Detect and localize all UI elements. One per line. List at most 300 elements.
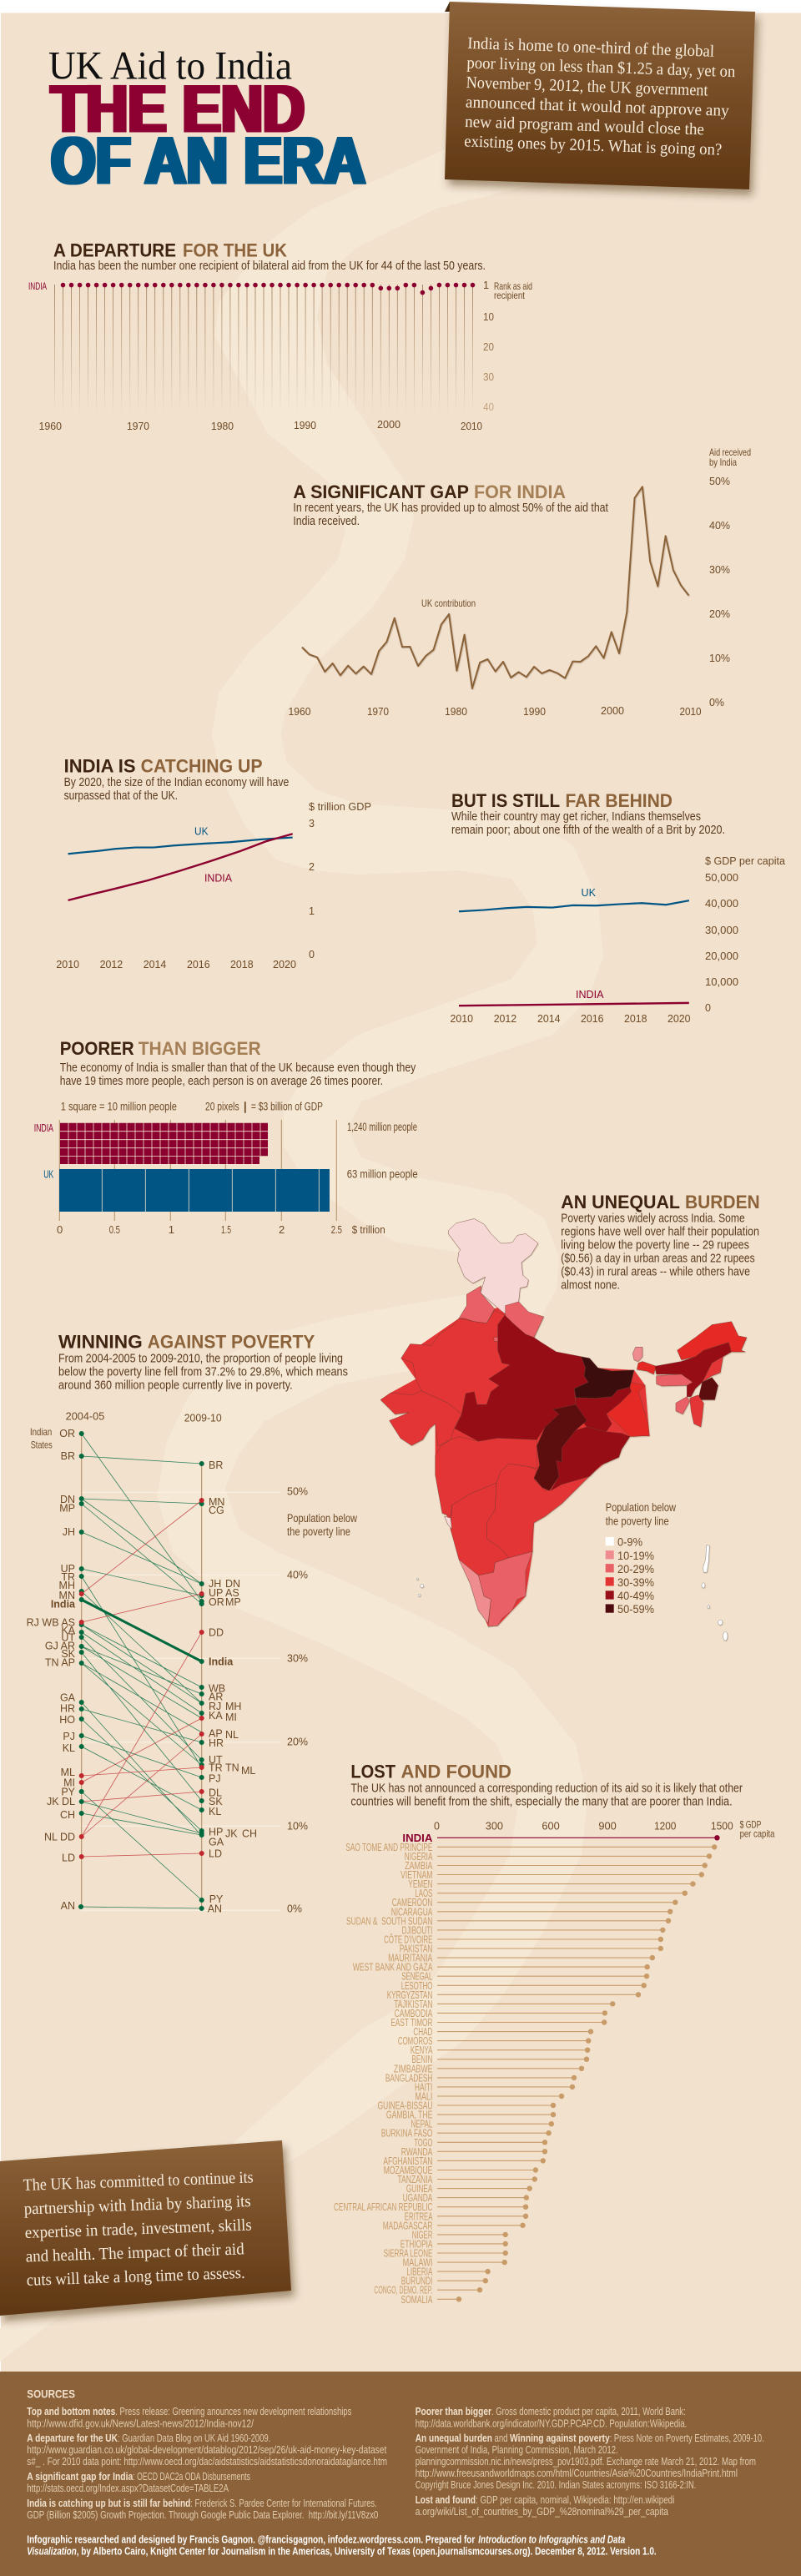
green dots [81, 1434, 202, 1908]
heading [64, 756, 263, 777]
year axis [451, 1013, 691, 1025]
column headers: States [31, 1439, 53, 1451]
intro callout text: November 9, 2012, the UK government [466, 73, 708, 100]
left state labels: UT [61, 1632, 75, 1644]
country labels: TANZANIA [397, 2173, 433, 2185]
country labels: GAMBIA, THE [386, 2109, 433, 2121]
left state labels: BR [61, 1450, 75, 1462]
subheading: regions have well over half their population [561, 1224, 759, 1238]
left state labels: HO [59, 1714, 75, 1726]
subheading: below the poverty line fell from 37.2% to 29.8%, which means [58, 1364, 348, 1379]
GDP per capita axis: 0 [705, 1002, 711, 1014]
sources left column: : Frederick S. Pardee Center for International Futures. [190, 2498, 377, 2509]
country labels: ZIMBABWE [394, 2062, 433, 2074]
year axis: 2010 [461, 421, 482, 432]
unit legend: 20 pixels ❙ = $3 billion of GDP [205, 1101, 323, 1114]
line: UK GDP [68, 838, 293, 854]
sources left column: : Guardian Data Blog on UK Aid 1960-2009. [118, 2432, 270, 2444]
right state labels: SK [209, 1796, 223, 1807]
country labels: CHAD [413, 2025, 432, 2038]
country labels: TAJIKISTAN [394, 1998, 432, 2010]
West Bengal north corridor [637, 1362, 657, 1374]
country labels: ETHIOPIA [400, 2237, 433, 2250]
percentage axis: the poverty line [287, 1525, 350, 1538]
closing callout text: and health. The impact of their aid [25, 2240, 244, 2266]
right state labels: NL [225, 1729, 239, 1741]
map legend: the poverty line [606, 1515, 669, 1527]
percentage axis [709, 446, 751, 708]
year axis: 2010 [679, 706, 702, 718]
year axis: 2020 [273, 959, 296, 970]
line labels: INDIA [204, 873, 233, 885]
left state labels: HR [60, 1703, 75, 1715]
country labels: SOMALIA [400, 2293, 433, 2306]
left state labels [27, 1428, 76, 1912]
country labels [334, 1832, 433, 2306]
line: India GDP per capita [459, 1003, 689, 1006]
right state labels: India [209, 1656, 234, 1667]
GDP per capita axis: 1200 [654, 1821, 676, 1832]
year axis: 1970 [127, 421, 149, 432]
credits: Visualization [27, 2546, 77, 2558]
series label: INDIA [28, 280, 47, 292]
section: lost and found [334, 1762, 775, 2306]
country labels: NICARAGUA [391, 1905, 433, 1918]
map legend: 40-49% [617, 1589, 654, 1602]
Mizoram [690, 1395, 703, 1427]
GDP per capita axis: 900 [598, 1821, 617, 1832]
country labels: CONGO, DEMO. REP. [374, 2284, 432, 2296]
country labels: SAO TOME AND PRINCIPE [345, 1841, 433, 1853]
trillion axis: $ trillion [352, 1223, 385, 1236]
GDP per capita axis: 50,000 [705, 872, 738, 884]
Jammu, Kashmir and Himachal [448, 1218, 538, 1314]
country labels: SUDAN & SOUTH SUDAN [346, 1914, 432, 1927]
percentage axis: Aid received [709, 446, 751, 458]
sources left column: Top and bottom notes [27, 2406, 115, 2417]
right state labels: ML [241, 1765, 255, 1777]
sources right column: An unequal burden [416, 2432, 492, 2444]
country labels: LAOS [415, 1887, 433, 1899]
closing callout text: expertise in trade, investment, skills [24, 2216, 252, 2242]
year axis: 2014 [144, 959, 166, 970]
West Bengal [607, 1370, 649, 1436]
trillion axis: 1.5 [221, 1223, 231, 1236]
right state labels: PJ [209, 1772, 221, 1784]
column headers: Indian [30, 1426, 52, 1438]
country labels: PAKISTAN [400, 1943, 432, 1954]
country labels: AFGHANISTAN [383, 2155, 432, 2167]
right state labels: JK [225, 1828, 238, 1840]
unit legend: 1 square = 10 million people [61, 1101, 177, 1113]
line labels: UK [194, 826, 209, 838]
subheading: around 360 million people currently live in poverty. [58, 1378, 293, 1392]
Bihar [574, 1357, 634, 1399]
left state labels: GJ AR [45, 1641, 75, 1652]
heading: FAR BEHIND [566, 790, 673, 811]
year axis: 2014 [537, 1013, 561, 1025]
percentage axis: 50% [709, 476, 730, 487]
left state labels: SK [61, 1648, 76, 1660]
left state labels: TR [61, 1571, 75, 1583]
Goa [445, 1516, 452, 1529]
year axis: 2012 [494, 1013, 516, 1025]
Maharashtra [436, 1436, 537, 1516]
country labels: KENYA [411, 2044, 433, 2056]
subheading [561, 1211, 759, 1292]
heading: AGAINST POVERTY [148, 1332, 315, 1353]
GDP per capita axis: $ GDP [740, 1819, 761, 1831]
country labels: INDIA [402, 1832, 433, 1844]
sources left column: A significant gap for India [27, 2471, 134, 2483]
GDP axis [309, 801, 371, 960]
subheading: almost none. [561, 1278, 620, 1292]
column headers [30, 1411, 222, 1451]
heading: WINNING [58, 1332, 143, 1353]
sources right column [416, 2406, 764, 2518]
heading: A SIGNIFICANT GAP [293, 481, 469, 502]
GDP axis: 2 [309, 861, 315, 873]
left state labels: UP [61, 1563, 75, 1575]
heading: LOST [350, 1762, 396, 1782]
sources footer [0, 2372, 801, 2576]
percentage axis: 30% [709, 564, 730, 576]
section: poorer than bigger [34, 1038, 418, 1236]
country labels: COMOROS [398, 2034, 433, 2047]
Chhattisgarh [534, 1404, 587, 1491]
percentage axis: 40% [287, 1570, 308, 1581]
GDP per capita axis: 10,000 [705, 976, 738, 988]
right state labels: UP [209, 1587, 223, 1599]
country labels: CAMEROON [392, 1896, 432, 1908]
subheading: ($0.56) a day in urban areas and 22 rupees [561, 1252, 755, 1265]
section: India is catching up [56, 756, 371, 970]
trillion axis: 0.5 [109, 1223, 120, 1236]
rank axis: Rank as aid [494, 280, 532, 292]
right state labels: KA [209, 1710, 223, 1722]
right state labels: MN [209, 1496, 224, 1508]
year axis: 2010 [451, 1013, 473, 1025]
left state labels: JK DL [47, 1796, 75, 1807]
left state labels: DN [60, 1494, 75, 1505]
red dots [82, 1500, 202, 1857]
heading: POORER [60, 1038, 134, 1059]
Meghalaya [657, 1374, 693, 1386]
sources right column: . Gross domestic product per capita, 2011, World Bank: [491, 2406, 686, 2417]
rank axis: 30 [483, 371, 494, 383]
subheading: While their country may get richer, Indians themselves [451, 809, 701, 824]
heading: CATCHING UP [141, 756, 263, 777]
subheading: have 19 times more people, each person is on average 26 times poorer. [60, 1074, 383, 1088]
sources left column: s#_ . For 2010 data point: http://www.oecd.org/dac/aidstatistics/aidstatisticsdonoraidataglance.htm [27, 2456, 387, 2468]
year axis [38, 419, 482, 432]
Gujarat [380, 1391, 461, 1446]
Karnataka [451, 1483, 509, 1575]
map legend: Population below [606, 1501, 676, 1514]
Jharkhand [576, 1387, 632, 1432]
Tamil Nadu [478, 1551, 532, 1626]
percentage axis: 10% [287, 1821, 308, 1832]
Arunachal Pradesh [678, 1322, 747, 1360]
GDP per capita axis: 20,000 [705, 950, 738, 962]
country labels: MALI [415, 2090, 432, 2103]
intro callout text: India is home to one-third of the global [467, 34, 715, 61]
sources right column: Government of India, Planning Commission, March 2012. [416, 2444, 618, 2456]
axis gridlines [59, 1120, 336, 1221]
year axis: 2000 [377, 419, 400, 431]
trillion axis: 1 [169, 1223, 174, 1236]
heading [451, 790, 673, 811]
line labels: INDIA [576, 989, 604, 1001]
Manipur [698, 1378, 718, 1399]
right state labels: AR [209, 1691, 223, 1703]
left state labels: LD [62, 1853, 75, 1864]
mainland base fill [380, 1306, 649, 1626]
percentage axis: 20% [709, 608, 730, 620]
right state labels: DN [225, 1578, 240, 1590]
GDP axis: 3 [309, 818, 315, 829]
country labels: SIERRA LEONE [384, 2246, 433, 2260]
country labels: NIGER [412, 2228, 432, 2241]
right state labels: HP [209, 1826, 223, 1837]
country labels: EAST TIMOR [390, 2016, 432, 2029]
heading [561, 1192, 760, 1212]
sources right column: Poorer than bigger [416, 2406, 491, 2417]
year axis: 1970 [367, 706, 389, 718]
right state labels: MH [225, 1701, 241, 1712]
subheading: From 2004-2005 to 2009-2010, the proportion of people living [58, 1351, 343, 1365]
country labels: DJIBOUTI [402, 1923, 432, 1936]
Punjab [459, 1286, 495, 1323]
sources left column: A departure for the UK [27, 2432, 118, 2444]
country labels: UGANDA [403, 2191, 433, 2204]
rank axis: 20 [483, 341, 494, 353]
subheading: countries will benefit from the shift, especially the many that are poorer than India. [350, 1794, 733, 1808]
subheading: surpassed that of the UK. [64, 789, 178, 803]
GDP per capita axis: per capita [740, 1828, 775, 1840]
country labels: VIETNAM [400, 1868, 432, 1881]
country labels: HAITI [415, 2080, 432, 2093]
GDP per capita axis: 1500 [711, 1821, 733, 1832]
country labels: BANGLADESH [385, 2071, 432, 2084]
country labels: NEPAL [411, 2118, 432, 2130]
unit legend [61, 1101, 323, 1114]
year axis: 1980 [211, 421, 234, 432]
percentage axis: 20% [287, 1737, 308, 1748]
left state labels: KL [63, 1742, 75, 1754]
trillion axis: 2 [279, 1223, 285, 1236]
section: winning against poverty [27, 1332, 357, 1915]
closing callout box [0, 2140, 291, 2316]
map legend [606, 1501, 676, 1616]
sources left column [27, 2406, 387, 2521]
UK bar [59, 1169, 330, 1212]
subheading: living below the poverty line -- 29 rupees [561, 1238, 749, 1252]
rank axis: recipient [494, 290, 526, 301]
country labels: WEST BANK AND GAZA [353, 1961, 433, 1974]
islands [416, 1545, 728, 1641]
left state labels: PY [61, 1787, 76, 1798]
left state labels: India [51, 1599, 76, 1611]
left state labels: TN AP [45, 1657, 75, 1669]
line: India GDP [68, 834, 293, 900]
percentage axis: by India [709, 456, 737, 468]
India average line [82, 1600, 202, 1661]
country labels: LIBERIA [406, 2266, 433, 2278]
right state labels: AS [225, 1587, 239, 1599]
Rajasthan and Haryana [401, 1310, 511, 1414]
sources left column: . Press release: Greening anounces new development relationships [115, 2406, 351, 2417]
heading [58, 1332, 315, 1353]
heading: BUT IS STILL [451, 790, 560, 811]
subheading: ($0.43) in rural areas -- while others have [561, 1265, 750, 1279]
subheading [58, 1351, 348, 1392]
left state labels: RJ WB AS [27, 1616, 75, 1628]
column headers: 2004-05 [66, 1411, 104, 1423]
left state labels: CH [60, 1809, 75, 1821]
right state labels: RJ [209, 1701, 221, 1712]
sources right column: Copyright Bruce Jones Design Inc. 2010. Indian States acronyms: ISO 3166-2:IN. [416, 2479, 696, 2491]
Delhi [494, 1337, 500, 1341]
percentage axis: 50% [287, 1486, 308, 1498]
sources right column: a.org/wiki/List_of_countries_by_GDP_%28nominal%29_per_capita [416, 2506, 668, 2518]
heading: BURDEN [685, 1192, 760, 1212]
country labels: GUINEA-BISSAU [378, 2100, 432, 2111]
title line: OF AN ERA: OF AN ERA [51, 124, 365, 199]
left state labels: NL DD [44, 1832, 75, 1843]
sources right column: Winning against poverty [510, 2432, 610, 2444]
right state labels: TR [209, 1762, 223, 1774]
Assam [655, 1343, 732, 1397]
line labels [576, 887, 604, 1001]
heading [60, 1038, 261, 1059]
GDP per capita axis [705, 855, 785, 1014]
country labels: NIGERIA [405, 1850, 433, 1863]
Tripura [676, 1397, 690, 1414]
GDP axis: 0 [309, 949, 315, 960]
right state labels: PY [209, 1893, 224, 1905]
left state labels: OR [59, 1428, 75, 1439]
left state labels: ML [61, 1767, 75, 1778]
country labels: KYRGYZSTAN [387, 1989, 432, 2001]
sources left column: India is catching up but is still far behind [27, 2498, 190, 2509]
bar labels: INDIA [34, 1122, 53, 1134]
year axis: 1990 [523, 706, 546, 718]
heading: AN UNEQUAL [561, 1192, 680, 1212]
year axis: 2012 [100, 959, 123, 970]
section: a departure for the UK [28, 240, 532, 432]
India population squares [60, 1122, 268, 1164]
sources left column: GDP (Billion $2005) Growth Projection. Through Google Public Data Explorer. http://bit.ly/11V8zx0 [27, 2509, 378, 2521]
right state labels: AP [209, 1728, 223, 1740]
right state labels: TN [225, 1762, 239, 1774]
rank axis: 40 [483, 401, 494, 413]
declining state lines [82, 1434, 202, 1908]
country labels: CENTRAL AFRICAN REPUBLIC [334, 2200, 432, 2213]
trillion axis: 2.5 [331, 1223, 342, 1236]
closing callout text: cuts will take a long time to assess. [26, 2264, 245, 2290]
closing callout text: partnership with India by sharing its [23, 2192, 251, 2218]
rank axis: 1 [483, 280, 489, 291]
sources right column: Lost and found [416, 2494, 476, 2506]
year axis: 1990 [294, 420, 316, 431]
subheading [451, 809, 725, 837]
right state labels [208, 1459, 257, 1915]
title line: THE END: THE END [51, 72, 305, 147]
subheading: remain poor; about one fifth of the wealth of a Brit by 2020. [451, 823, 725, 837]
intro callout text: existing ones by 2015. What is going on? [464, 132, 723, 159]
subheading [64, 775, 289, 803]
year axis: 1960 [289, 706, 311, 718]
percentage axis: Population below [287, 1512, 357, 1525]
right state labels: CG [209, 1505, 224, 1516]
right state labels: BR [209, 1459, 223, 1471]
country labels: CÔTE D'IVOIRE [384, 1933, 433, 1946]
credits: Introduction to Infographics and Data [478, 2533, 625, 2545]
GDP per capita axis: $ GDP per capita [705, 855, 785, 867]
year axis: 2000 [601, 705, 624, 717]
intro callout box [445, 2, 755, 189]
left state labels: JH [63, 1526, 75, 1538]
country labels: TOGO [414, 2136, 432, 2149]
right state labels: AN [208, 1903, 222, 1915]
right state labels: DL [209, 1787, 222, 1798]
bar labels: 1,240 million people [347, 1121, 417, 1133]
percentage axis: 40% [709, 520, 730, 532]
percentage axis: 30% [287, 1653, 308, 1665]
sources left column: : OECD DAC2a ODA Disbursements [133, 2471, 250, 2483]
intro callout text [464, 34, 736, 159]
column headers: 2009-10 [184, 1412, 222, 1424]
sources heading: SOURCES [27, 2387, 75, 2400]
country labels: ERITREA [405, 2210, 433, 2222]
closing callout text [23, 2168, 257, 2290]
trillion axis [57, 1223, 385, 1236]
left state labels: PJ [63, 1731, 75, 1742]
section: a significant gap for India [289, 446, 751, 718]
subheading: In recent years, the UK has provided up to almost 50% of the aid that [293, 501, 609, 515]
line labels: UK [581, 887, 597, 899]
Nagaland [703, 1357, 723, 1382]
GDP per capita axis: 0 [434, 1821, 440, 1832]
line: UK GDP per capita [459, 900, 689, 911]
year axis [56, 959, 296, 970]
section: an unequal burden [380, 1192, 760, 1641]
map legend: 30-39% [617, 1575, 654, 1589]
right state labels: HR [209, 1737, 224, 1749]
line label: UK contribution [421, 597, 476, 609]
map legend: 0-9% [617, 1535, 642, 1549]
year axis: 2020 [668, 1013, 691, 1025]
credits: , by Alberto Cairo, Knight Center for Journalism in the Americas, University of Texas (open.journalismcourses.org). December 8, 2012. Version 1.0. [77, 2546, 657, 2558]
heading: INDIA IS [64, 756, 136, 777]
line chart: UK contribution [302, 486, 688, 688]
title [48, 44, 365, 199]
right state labels: KL [209, 1806, 221, 1817]
country labels: MAURITANIA [388, 1952, 433, 1964]
rank chart [28, 280, 532, 432]
country labels: SENEGAL [401, 1970, 432, 1983]
right state labels: GA [209, 1837, 224, 1848]
heading: A DEPARTURE [53, 240, 176, 260]
Uttar Pradesh and Madhya Pradesh [455, 1315, 588, 1441]
right state labels: CH [242, 1828, 257, 1840]
sources left column: http://www.dfid.gov.uk/News/Latest-news/2012/India-nov12/ [27, 2417, 254, 2429]
background swoosh [0, 138, 603, 2362]
map legend: 20-29% [617, 1562, 654, 1575]
right state labels: OR [209, 1596, 224, 1608]
sources right column: and [494, 2432, 508, 2444]
